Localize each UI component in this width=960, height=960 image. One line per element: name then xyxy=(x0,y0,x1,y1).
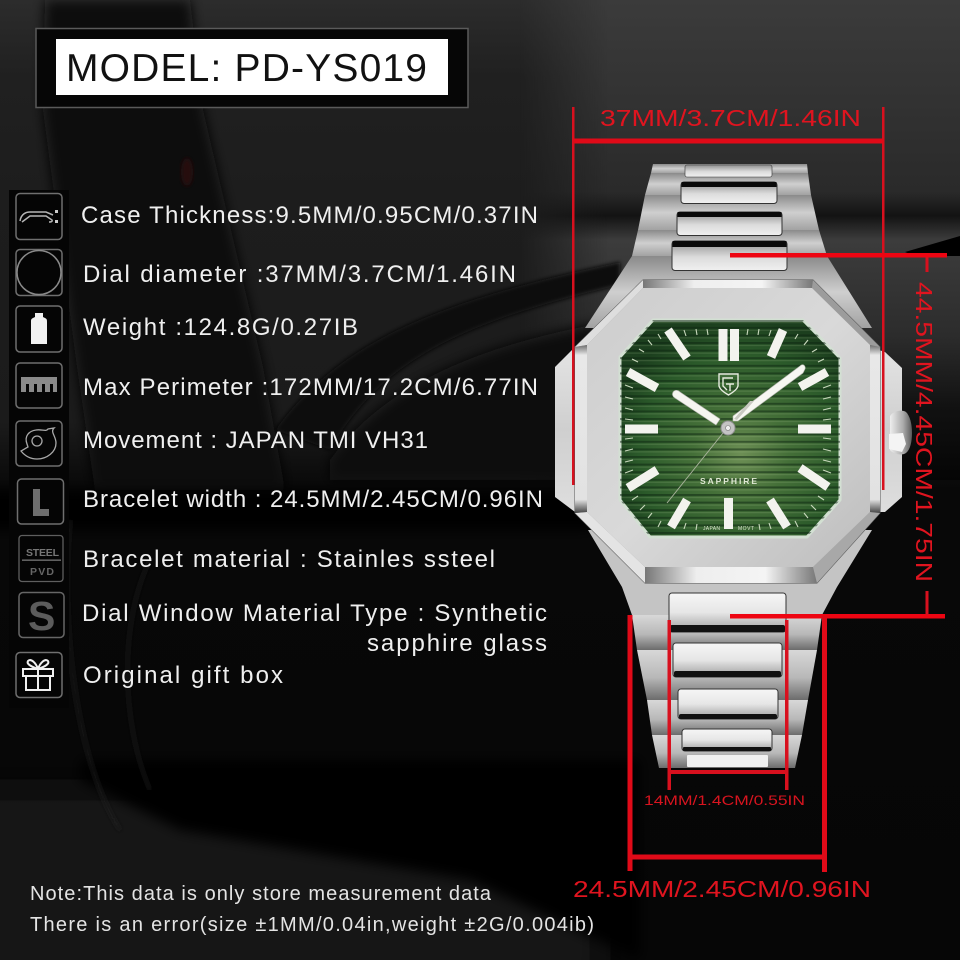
icon: gift box xyxy=(16,652,62,698)
spec: case thickness: Case Thickness:9.5MM/0.95CM/0.37IN xyxy=(81,202,538,229)
crown xyxy=(889,411,912,454)
spec: movement: Movement : JAPAN TMI VH31 xyxy=(83,427,428,454)
spec: dial diameter: Dial diameter :37MM/3.7CM/1.46IN xyxy=(83,261,516,288)
brand text: SAPPHIRE xyxy=(700,476,757,486)
watch hands xyxy=(667,365,805,503)
spec: weight: Weight :124.8G/0.27IB xyxy=(83,314,358,341)
icon: S letter: S xyxy=(28,593,55,639)
icon: S letter xyxy=(19,592,64,639)
case bezel xyxy=(575,280,880,583)
upper bracelet xyxy=(585,164,872,328)
spec: dial window material: Dial Window Material Type : Synthetic xyxy=(82,600,547,627)
dimension: bracelet width 24.5mm xyxy=(573,615,871,902)
spec: bracelet width: Bracelet width : 24.5MM/2.45CM/0.96IN xyxy=(83,486,543,513)
icon: steel PVD xyxy=(19,536,63,582)
spec: dial window material xyxy=(82,600,547,657)
icon: movement xyxy=(16,421,62,466)
dimension: case width 37mm: 37MM/3.7CM/1.46IN xyxy=(600,105,861,131)
icon column xyxy=(9,190,69,708)
model header xyxy=(36,28,468,108)
icon: steel PVD: PVD xyxy=(30,566,54,578)
icon: weight xyxy=(16,306,62,352)
dimension: case width 37mm xyxy=(572,105,884,490)
spec: max perimeter: Max Perimeter :172MM/17.2CM/6.77IN xyxy=(83,374,538,401)
hour markers xyxy=(625,329,831,529)
spec: bracelet material: Bracelet material : Stainles ssteel xyxy=(83,546,495,573)
dial xyxy=(618,318,842,539)
dimension: lug to lug 44.5mm xyxy=(730,253,947,618)
watch xyxy=(555,164,912,768)
icon: L letter xyxy=(18,479,64,524)
dimension: lug to lug 44.5mm: 44.5MM/4.45CM/1.75IN xyxy=(911,282,937,582)
bottom dial text xyxy=(703,526,754,532)
bottom dial text: JAPAN xyxy=(703,526,720,532)
icon: ruler xyxy=(16,363,62,408)
footnote xyxy=(30,883,594,936)
spec: dial window material: sapphire glass xyxy=(367,630,547,657)
logo shield xyxy=(719,374,738,395)
lower bracelet xyxy=(588,530,872,768)
footnote: Note:This data is only store measurement data xyxy=(30,883,492,905)
model header: MODEL: PD-YS019 xyxy=(66,47,427,90)
footnote: There is an error(size ±1MM/0.04in,weight ±2G/0.004ib) xyxy=(30,914,594,936)
specification text xyxy=(81,202,547,689)
dimension: bracelet inner width 14mm: 14MM/1.4CM/0.55IN xyxy=(644,792,805,808)
dimension: bracelet width 24.5mm: 24.5MM/2.45CM/0.96IN xyxy=(573,876,871,902)
icon: steel PVD: STEEL xyxy=(26,547,60,559)
dimension: bracelet inner width 14mm xyxy=(644,620,805,808)
case side lugs xyxy=(555,347,902,512)
icon: dial diameter xyxy=(16,250,62,296)
bottom dial text: MOVT xyxy=(738,526,754,532)
icon: case thickness xyxy=(16,194,62,240)
minute ticks xyxy=(625,329,831,530)
spec: gift box: Original gift box xyxy=(83,662,283,689)
